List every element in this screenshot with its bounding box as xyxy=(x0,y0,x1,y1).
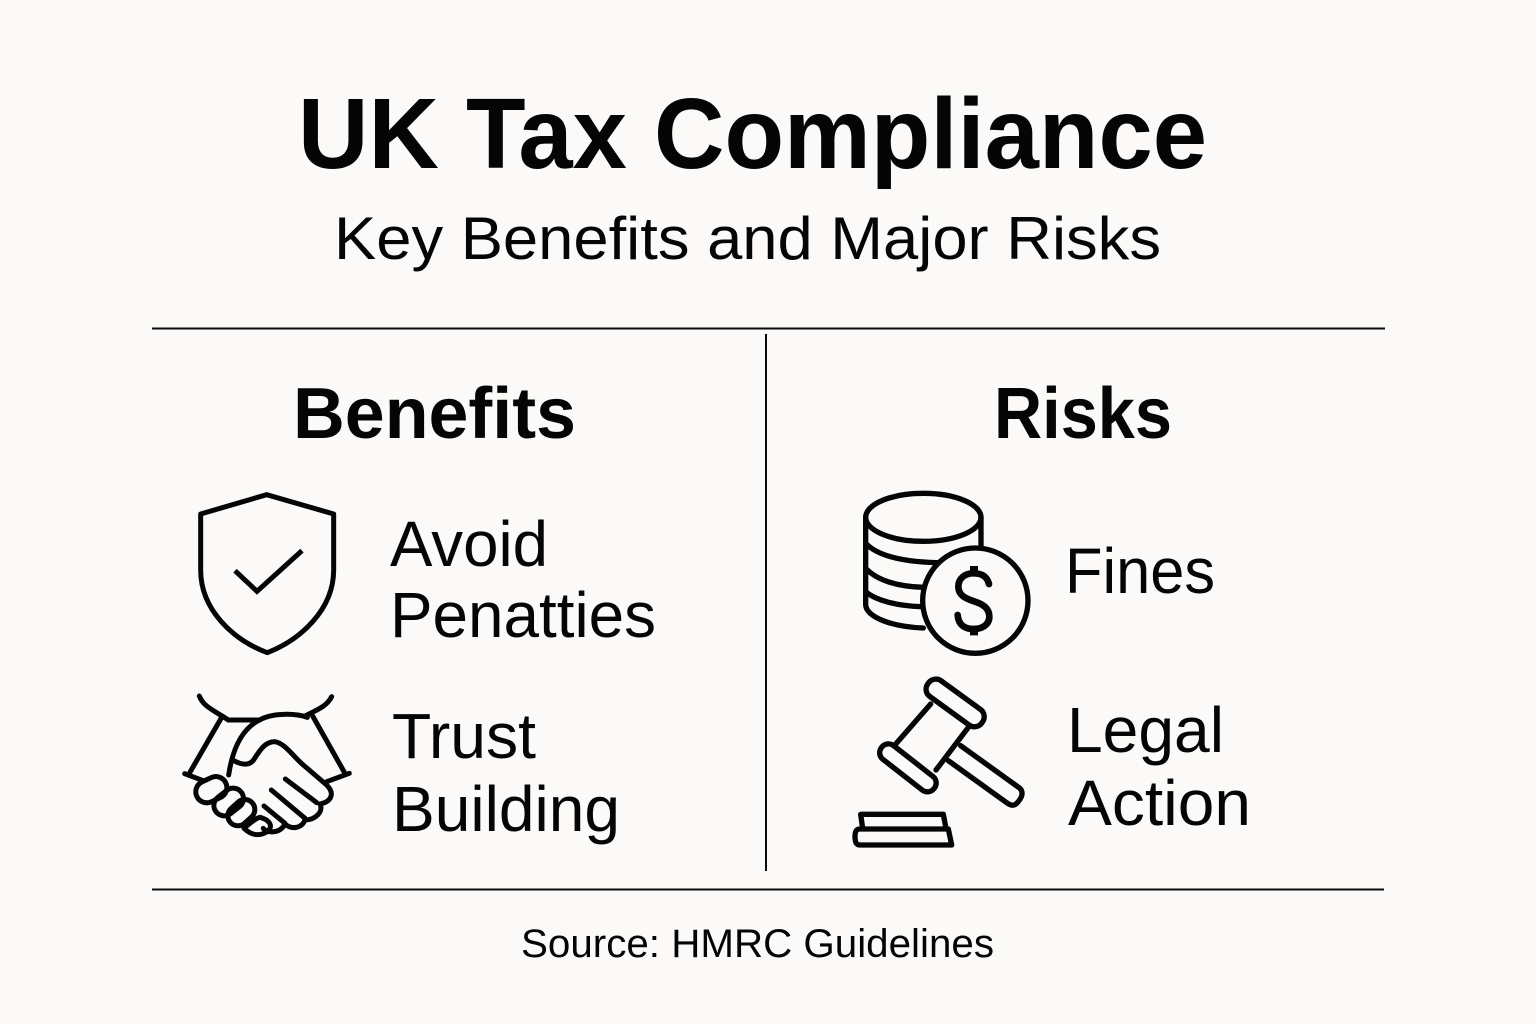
text: avoid penalties: Penatties xyxy=(390,579,656,651)
title: UK Tax Compliance xyxy=(298,78,1207,190)
text: avoid penalties xyxy=(390,508,656,651)
text: avoid penalties: Avoid xyxy=(390,508,548,580)
heading: risks: Risks xyxy=(994,374,1172,454)
text: legal action xyxy=(1067,694,1251,839)
panel: benefits xyxy=(185,374,656,845)
icon: shield with check xyxy=(201,495,334,653)
icon: coin stack with dollar coin xyxy=(866,493,1028,653)
text: legal action: Legal xyxy=(1067,694,1224,766)
source note: Source: HMRC Guidelines xyxy=(521,922,994,966)
text: trust building xyxy=(392,700,620,845)
text: trust building: Trust xyxy=(392,700,536,772)
text: trust building: Building xyxy=(392,773,620,845)
panel: risks xyxy=(855,374,1251,845)
icon: handshake xyxy=(185,696,349,835)
text: legal action: Action xyxy=(1068,767,1251,839)
icon: gavel xyxy=(855,676,1022,845)
text: fines: Fines xyxy=(1065,535,1215,607)
heading: benefits: Benefits xyxy=(293,374,576,454)
subtitle: Key Benefits and Major Risks xyxy=(334,205,1161,272)
